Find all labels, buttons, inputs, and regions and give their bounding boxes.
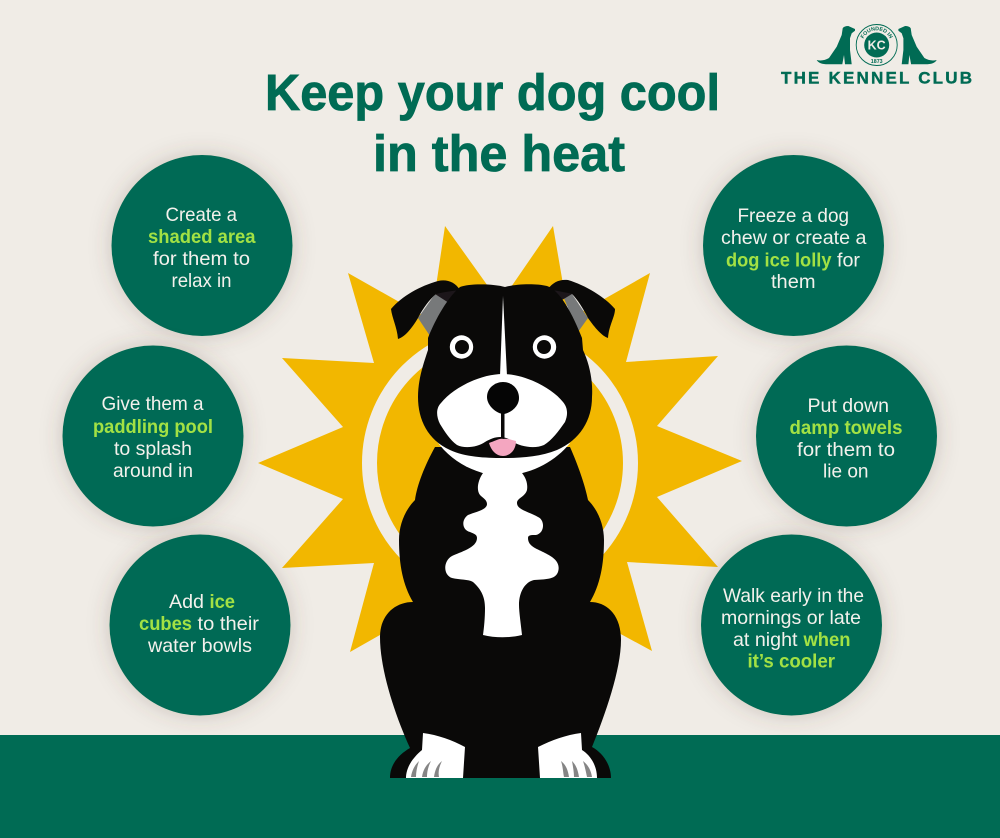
- tip: ice cubes: to their: [198, 613, 260, 635]
- tip: paddling pool: Give them a: [102, 393, 204, 415]
- logo wordmark: THE KENNEL CLUB: [781, 68, 972, 88]
- dog: [380, 280, 621, 778]
- logo: The Kennel Club: [781, 24, 972, 88]
- dog forehead blaze: [500, 296, 507, 376]
- tip: shaded area: shaded area: [148, 226, 256, 248]
- tip: walk when cooler: at night: [733, 629, 798, 651]
- tip: damp towels: [756, 346, 937, 526]
- tip: ice cubes: cubes: [139, 613, 192, 635]
- logo right dog: [898, 26, 937, 64]
- tip: shaded area: [112, 155, 292, 336]
- tip: dog ice lolly: [703, 155, 884, 336]
- dog right ear inner: [563, 294, 588, 332]
- dog left ear: [391, 280, 460, 339]
- dog collar: [430, 420, 570, 476]
- dog mouth line: [501, 408, 504, 440]
- dog left eye: [450, 335, 473, 359]
- logo: The Kennel Club: FOUNDED IN: [860, 26, 893, 38]
- dog right ear: [548, 280, 615, 338]
- dog body: [380, 447, 621, 778]
- dog chest marking: [445, 473, 559, 637]
- title: [265, 64, 720, 182]
- tip: walk when cooler: mornings or late: [721, 607, 861, 629]
- logo left dog: [817, 26, 855, 64]
- tip: ice cubes: ice: [210, 591, 235, 613]
- dog head: [418, 284, 592, 458]
- tip: dog ice lolly: chew or create a: [721, 227, 867, 249]
- logo roundel: [856, 24, 897, 66]
- tip: paddling pool: [62, 346, 244, 526]
- dog left paw: [406, 733, 465, 778]
- tip: paddling pool: to splash: [114, 438, 192, 460]
- dog right eye: [533, 335, 556, 359]
- tip: damp towels: Put down: [808, 395, 889, 417]
- tip: damp towels: lie on: [823, 460, 868, 482]
- sun ring: [370, 332, 630, 594]
- sun rays: [258, 226, 742, 700]
- tip: shaded area: relax in: [172, 270, 232, 292]
- tip: walk when cooler: Walk early in the: [723, 585, 864, 607]
- tip: dog ice lolly: them: [771, 271, 816, 293]
- title: Keep your dog cool: [265, 64, 720, 121]
- dog nose: [487, 382, 519, 414]
- tip: walk when cooler: [701, 534, 882, 716]
- tip: dog ice lolly: for: [837, 250, 861, 272]
- tip: shaded area: for them to: [153, 248, 250, 270]
- tip: ice cubes: [110, 534, 290, 716]
- tip: walk when cooler: when: [803, 629, 850, 651]
- tip: paddling pool: around in: [113, 460, 193, 482]
- dog left ear inner: [418, 294, 450, 336]
- tip: ice cubes: water bowls: [147, 635, 252, 657]
- dog muzzle: [437, 374, 567, 447]
- tip: damp towels: for them to: [797, 439, 895, 461]
- tip: ice cubes: Add: [169, 591, 204, 613]
- tip: dog ice lolly: Freeze a dog: [738, 205, 849, 227]
- sun: [258, 226, 742, 700]
- tip: shaded area: Create a: [166, 204, 237, 226]
- tip: paddling pool: paddling pool: [93, 416, 213, 438]
- tip: damp towels: damp towels: [790, 417, 903, 439]
- dog tongue: [489, 439, 516, 456]
- logo: The Kennel Club: 1873: [871, 59, 883, 65]
- logo: The Kennel Club: KC: [868, 38, 886, 52]
- title: in the heat: [373, 125, 625, 182]
- tip: dog ice lolly: dog ice lolly: [726, 250, 832, 272]
- ground band: [0, 735, 1000, 838]
- dog right paw: [538, 733, 597, 778]
- tip: walk when cooler: it’s cooler: [748, 650, 835, 672]
